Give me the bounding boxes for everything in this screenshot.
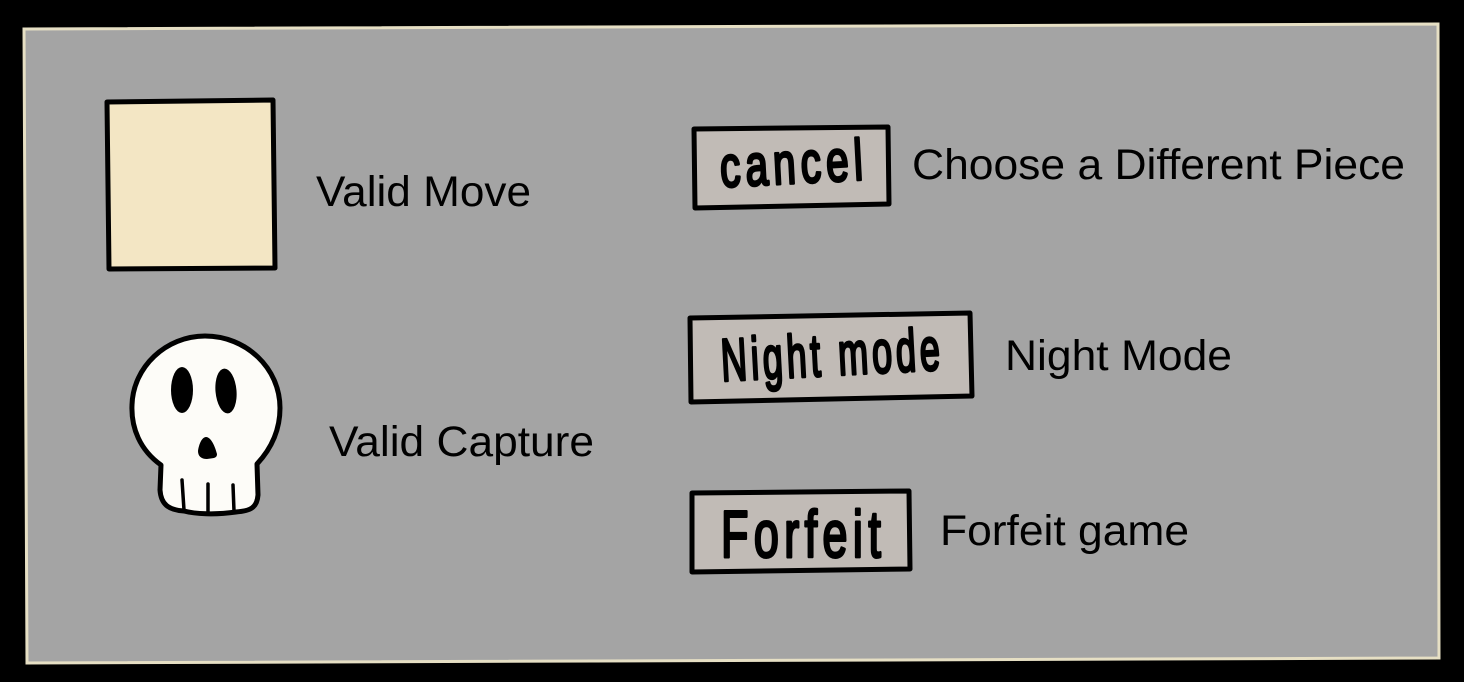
button: forfeit: Forfeit — [721, 497, 881, 571]
icon: valid move square — [107, 100, 275, 269]
label: valid move: Valid Move — [316, 168, 531, 216]
button: forfeit — [692, 491, 910, 572]
label: forfeit description: Forfeit game — [940, 507, 1189, 555]
button: night mode — [690, 313, 972, 402]
button: night mode: Night mode — [719, 316, 941, 394]
label: valid capture: Valid Capture — [329, 418, 594, 466]
label: cancel description: Choose a Different Piece — [912, 141, 1405, 189]
button: cancel: cancel — [718, 127, 864, 200]
label: night mode description: Night Mode — [1005, 332, 1232, 380]
icon: skull — [132, 336, 280, 514]
button: cancel — [694, 127, 889, 208]
